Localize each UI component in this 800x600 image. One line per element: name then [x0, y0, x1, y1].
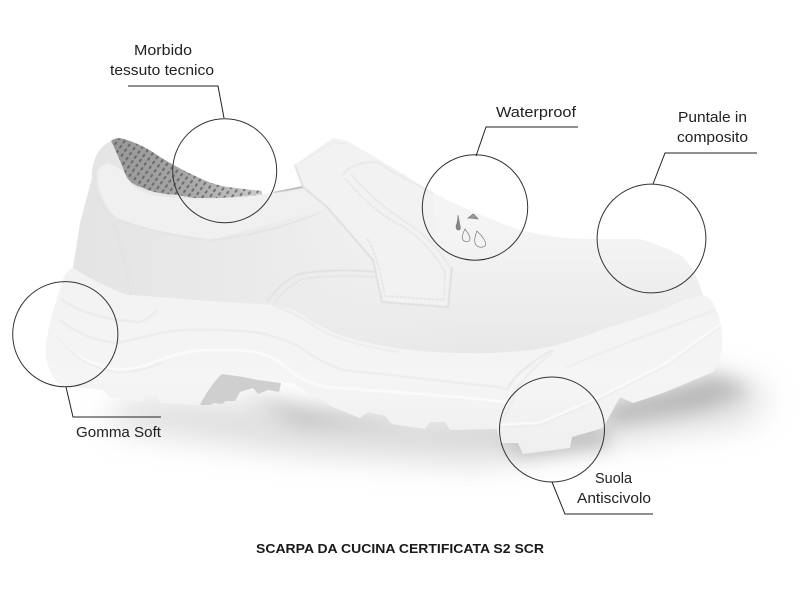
ground shadow	[110, 375, 770, 462]
sole contour lines	[55, 300, 720, 427]
callout: puntale in composito: Puntale in	[678, 110, 747, 126]
callout: gomma soft: Gomma Soft	[76, 425, 161, 441]
callout: waterproof	[422, 105, 578, 260]
title: SCARPA DA CUCINA CERTIFICATA S2 SCR	[256, 541, 545, 556]
callout: morbido tessuto tecnico: tessuto tecnico	[110, 63, 214, 79]
callout: suola antiscivolo	[500, 377, 653, 514]
callout: morbido tessuto tecnico: Morbido	[134, 43, 192, 59]
arch tread	[200, 374, 281, 405]
collar rim and stitching	[94, 164, 328, 296]
quarter seam	[267, 270, 377, 302]
callout: morbido tessuto tecnico	[110, 43, 277, 223]
callout: puntale in composito	[597, 110, 757, 293]
shoe	[46, 138, 722, 454]
callout: puntale in composito: composito	[677, 130, 748, 146]
callout: waterproof: Waterproof	[496, 105, 577, 121]
callout: suola antiscivolo: Suola	[595, 471, 633, 487]
shoe upper	[73, 138, 703, 380]
waterproof drops icon	[456, 214, 486, 247]
sole	[46, 268, 722, 454]
elastic flap	[295, 138, 452, 307]
callout: gomma soft	[13, 282, 161, 441]
shoe lining mesh	[111, 138, 262, 199]
dark sliver behind flap	[273, 186, 305, 194]
callout: suola antiscivolo: Antiscivolo	[577, 491, 651, 507]
